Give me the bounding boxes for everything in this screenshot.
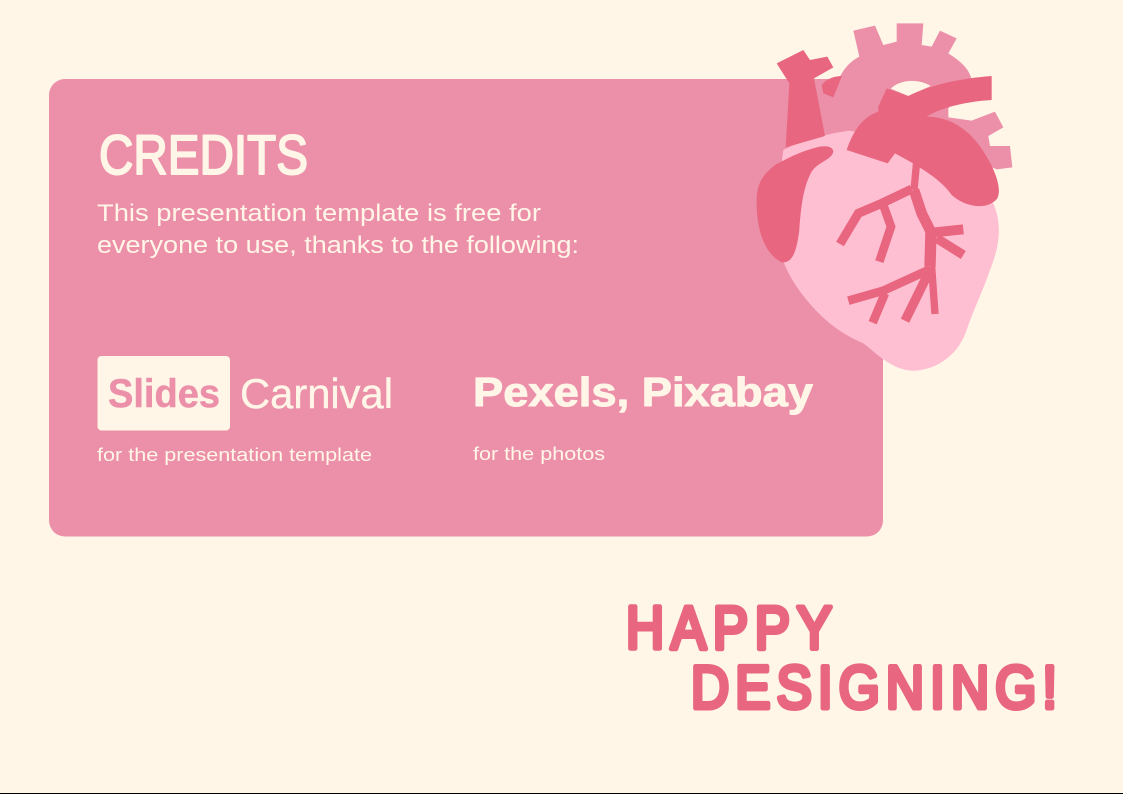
heading: credits: CREDITS [99, 123, 308, 186]
heading: happy designing [626, 594, 1057, 721]
text block: template caption: for the presentation template [97, 445, 372, 465]
text block: intro: everyone to use, thanks to the following: [97, 232, 579, 259]
logo: SlidesCarnival [98, 356, 393, 430]
small vessel stub [822, 76, 842, 97]
text block: photos caption: for the photos [473, 444, 605, 464]
logo: Pexels, Pixabay: Pexels, Pixabay [473, 369, 813, 415]
text block: intro: This presentation template is free for [97, 200, 541, 227]
heading: happy designing: HAPPY [626, 594, 832, 661]
heading: happy designing: DESIGNING! [691, 654, 1057, 721]
logo: SlidesCarnival: Slides [108, 372, 220, 416]
panel: credits card [49, 79, 883, 536]
right atrium [757, 146, 833, 262]
arch opening [891, 81, 931, 96]
logo: SlidesCarnival: Carnival [240, 370, 393, 417]
aortic arch back [822, 23, 1012, 169]
aorta and left atrium [847, 76, 999, 206]
text block: intro [97, 200, 579, 259]
coronary arteries [840, 162, 963, 323]
heart body [773, 131, 999, 371]
pulmonary vessel [777, 50, 833, 147]
illustration: anatomical heart [757, 23, 1012, 371]
